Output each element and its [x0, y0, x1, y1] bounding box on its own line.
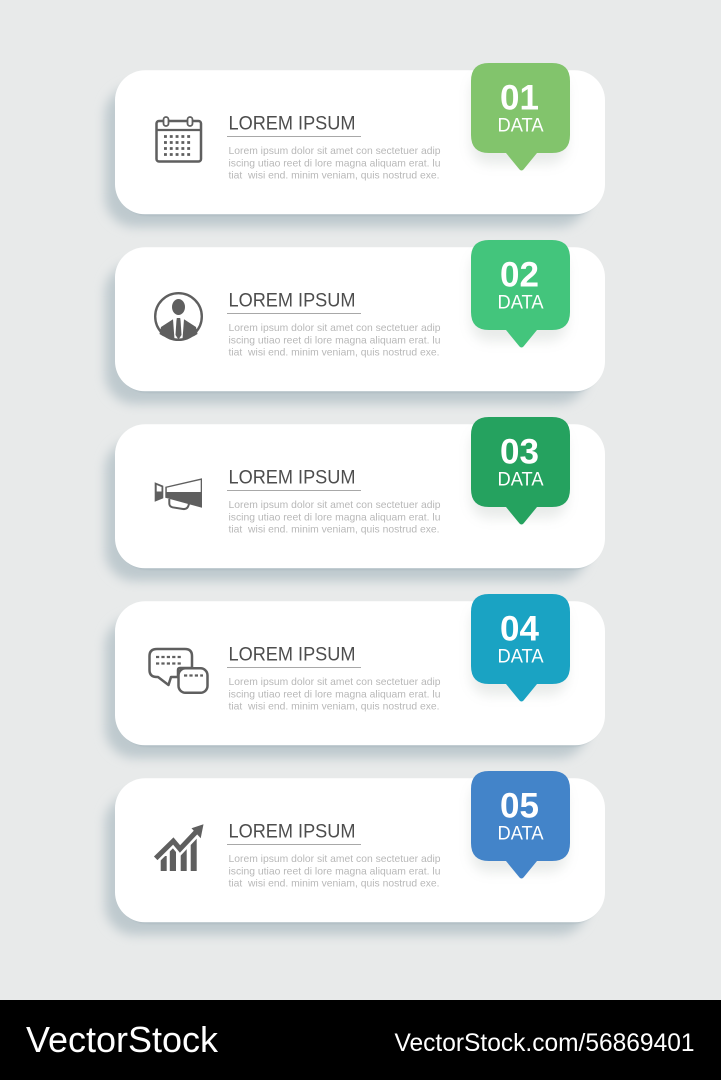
body text 05: Lorem ipsum dolor sit amet con sectetuer adip [228, 854, 441, 865]
card 05 [105, 778, 605, 935]
badge 02: 02 [500, 256, 539, 294]
badge 05: 05 [500, 786, 539, 826]
badge 03: DATA [498, 470, 544, 490]
body text 03: Lorem ipsum dolor sit amet con sectetuer adip [228, 500, 441, 511]
body text 01: Lorem ipsum dolor sit amet con sectetuer adip [228, 146, 441, 157]
panel: step 01 [105, 63, 605, 227]
body text 03 [228, 500, 441, 536]
body text 04: tiat wisi end. minim veniam, quis nostrud exe. [228, 702, 440, 712]
body text 05 [228, 854, 441, 890]
card 02 [105, 247, 605, 404]
body text 04: iscing utiao reet di lore magna aliquam erat. lu [228, 689, 441, 700]
body text 01: iscing utiao reet di lore magna aliquam erat. lu [228, 158, 441, 169]
body text 04 [228, 677, 441, 712]
badge 03 [471, 417, 570, 524]
heading 02: LOREM IPSUM [228, 290, 356, 311]
icon: calendar [156, 117, 201, 162]
body text 05: iscing utiao reet di lore magna aliquam erat. lu [228, 866, 441, 877]
body text 02: Lorem ipsum dolor sit amet con sectetuer adip [228, 323, 441, 334]
panel: step 02 [105, 240, 605, 404]
icon: chat bubbles [150, 649, 208, 693]
badge 05 [471, 771, 570, 878]
card 01 [105, 70, 605, 227]
heading 05: LOREM IPSUM [228, 821, 356, 842]
body text 02: tiat wisi end. minim veniam, quis nostrud exe. [228, 348, 440, 358]
body text 02 [228, 323, 441, 358]
panel: step 05 [105, 771, 605, 935]
heading 04: LOREM IPSUM [228, 644, 356, 665]
icon: megaphone [155, 478, 202, 509]
footer bar [0, 1000, 721, 1080]
badge 02: DATA [498, 292, 544, 314]
body text 01 [228, 146, 441, 182]
badge 01: DATA [498, 116, 544, 136]
badge 03: 03 [500, 432, 539, 472]
body text 03: tiat wisi end. minim veniam, quis nostrud exe. [228, 524, 440, 536]
card 03 [105, 424, 605, 581]
icon: growth chart [153, 824, 204, 871]
badge 01 [471, 63, 570, 170]
heading 01: LOREM IPSUM [228, 113, 356, 134]
badge 04: 04 [500, 610, 539, 648]
badge 04 [471, 594, 570, 702]
badge 04: DATA [498, 646, 544, 668]
icon: businessman [155, 293, 202, 340]
body text 02: iscing utiao reet di lore magna aliquam erat. lu [228, 335, 441, 346]
badge 01: 01 [500, 78, 539, 118]
panel: step 03 [105, 417, 605, 581]
heading 03: LOREM IPSUM [228, 467, 356, 488]
panel: step 04 [105, 594, 605, 758]
body text 03: iscing utiao reet di lore magna aliquam erat. lu [228, 512, 441, 523]
body text 01: tiat wisi end. minim veniam, quis nostrud exe. [228, 170, 440, 182]
badge 02 [471, 240, 570, 348]
body text 05: tiat wisi end. minim veniam, quis nostrud exe. [228, 878, 440, 890]
card 04 [105, 601, 605, 758]
footer logo: VectorStock [26, 1019, 219, 1060]
badge 05: DATA [498, 824, 544, 844]
footer url: VectorStock.com/56869401 [394, 1029, 694, 1057]
body text 04: Lorem ipsum dolor sit amet con sectetuer adip [228, 677, 441, 688]
